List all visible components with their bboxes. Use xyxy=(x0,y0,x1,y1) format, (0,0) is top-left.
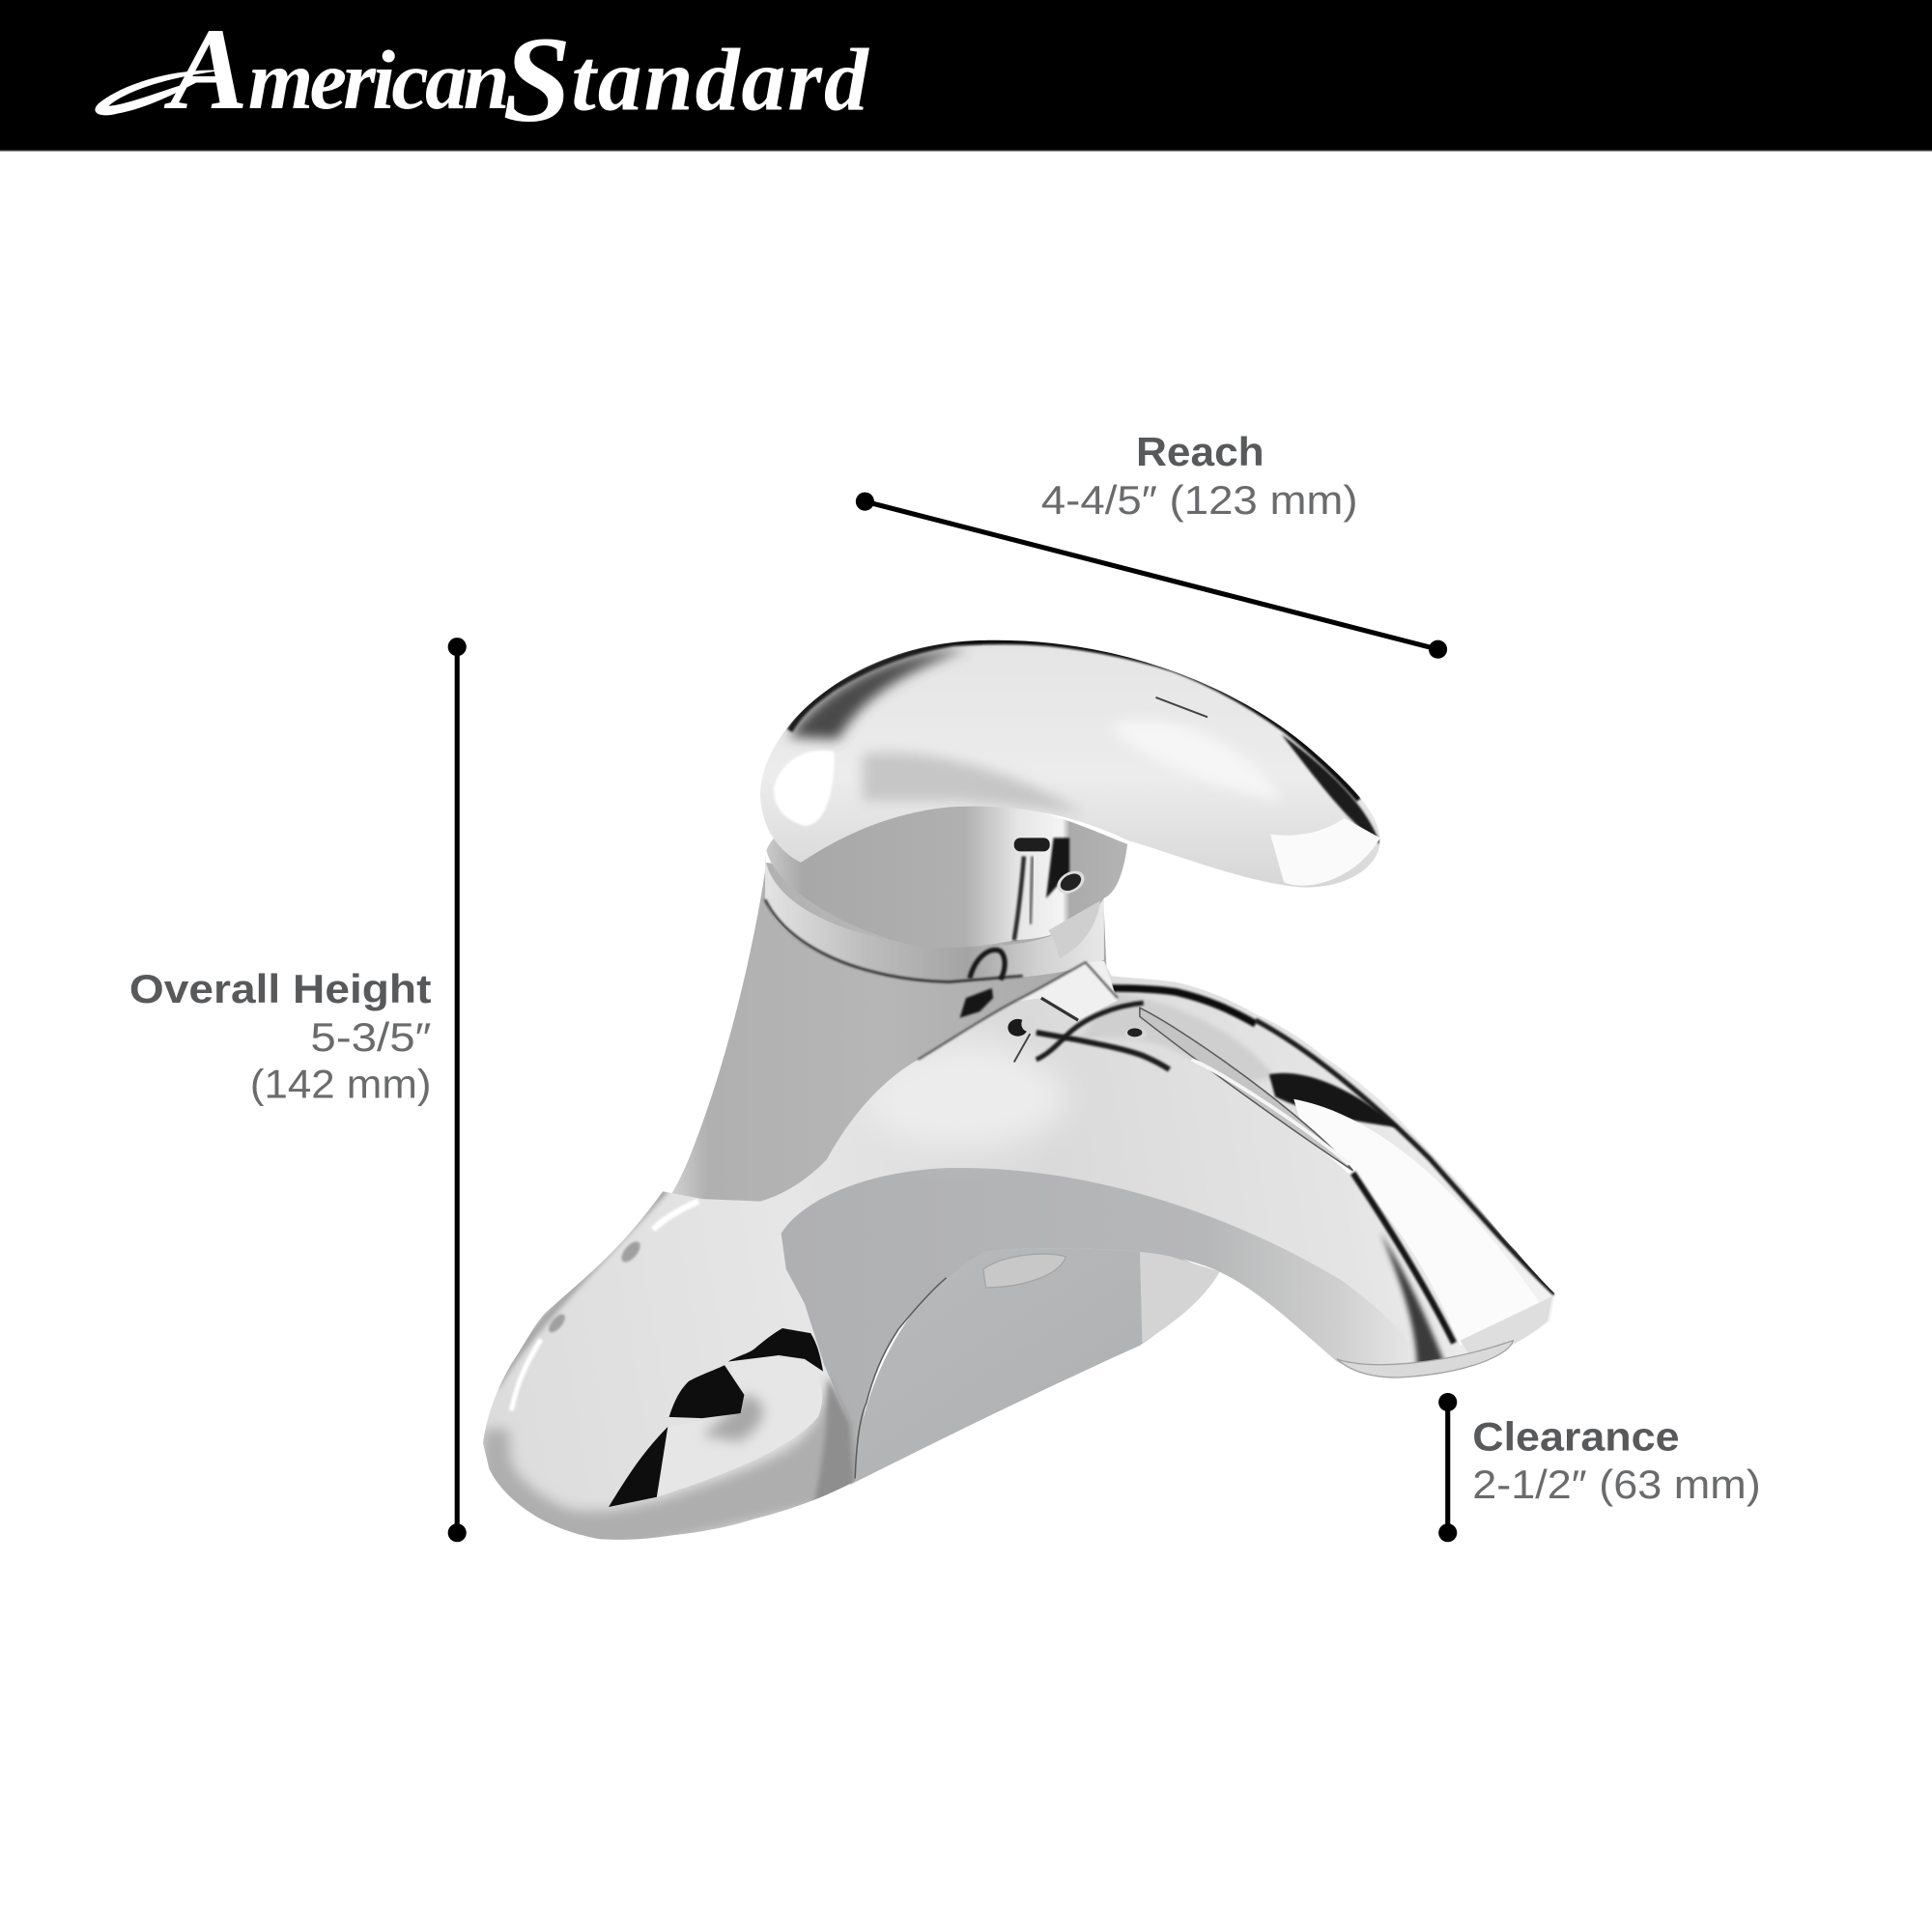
base edge highlights xyxy=(496,1189,666,1386)
ring reflections xyxy=(970,950,1005,980)
chrome ring xyxy=(765,856,1104,982)
header band with logo xyxy=(0,0,1932,152)
base rim shading xyxy=(483,1379,854,1540)
handle bright spot xyxy=(774,751,835,826)
spout top dark reflection xyxy=(1112,988,1256,1024)
clearance label: Clearance xyxy=(1472,1413,1680,1459)
spout bright facet xyxy=(1293,1099,1540,1346)
clearance label: 2-1/2″ (63 mm) xyxy=(1472,1462,1761,1507)
spout top chrome band xyxy=(1078,992,1275,1084)
lower dark line xyxy=(1037,1033,1169,1069)
logo: American Standard xyxy=(95,5,870,148)
logo: American Standard: tandard xyxy=(571,31,870,129)
screw xyxy=(1008,1019,1028,1037)
stem and joint xyxy=(918,838,1169,1069)
spout and base body xyxy=(469,949,1577,1555)
height label: 5-3/5″ xyxy=(310,1014,432,1060)
arch edge line xyxy=(855,1278,947,1479)
handle underside xyxy=(863,753,1084,813)
lever handle xyxy=(760,639,1379,888)
reach label: Reach xyxy=(1136,429,1264,474)
height label: (142 mm) xyxy=(250,1061,431,1106)
handle cone xyxy=(766,799,1127,948)
dimension: Overall Height xyxy=(129,638,467,1542)
under-arch recess xyxy=(850,1244,1220,1485)
base reflection bump xyxy=(657,1385,823,1497)
dimension: Reach xyxy=(856,429,1447,659)
clearance arrow line xyxy=(1438,1393,1457,1542)
height label xyxy=(129,966,432,1106)
logo: American Standard: S xyxy=(502,11,571,148)
stem stripes xyxy=(1014,856,1024,940)
height label: Overall Height xyxy=(129,966,431,1011)
reach label xyxy=(1041,429,1358,523)
base black reflections xyxy=(609,1427,668,1507)
aerator xyxy=(1337,1341,1513,1378)
logo: American Standard: American xyxy=(163,5,506,134)
clearance label xyxy=(1472,1413,1761,1507)
height arrow line xyxy=(448,638,467,1542)
reach label: 4-4/5″ (123 mm) xyxy=(1041,477,1358,523)
reach arrow line xyxy=(856,493,1447,659)
faucet product image xyxy=(469,629,1577,1555)
curved strip xyxy=(1037,1003,1144,1060)
upper spout soft highlight xyxy=(863,1041,1067,1147)
spout vane detail xyxy=(1140,1008,1353,1171)
neck xyxy=(1014,961,1118,1020)
faucet column xyxy=(663,863,1109,1233)
dimension: Clearance xyxy=(1438,1393,1761,1542)
handle dark top edge xyxy=(790,641,1359,800)
spout underside wedge xyxy=(781,1168,1385,1482)
